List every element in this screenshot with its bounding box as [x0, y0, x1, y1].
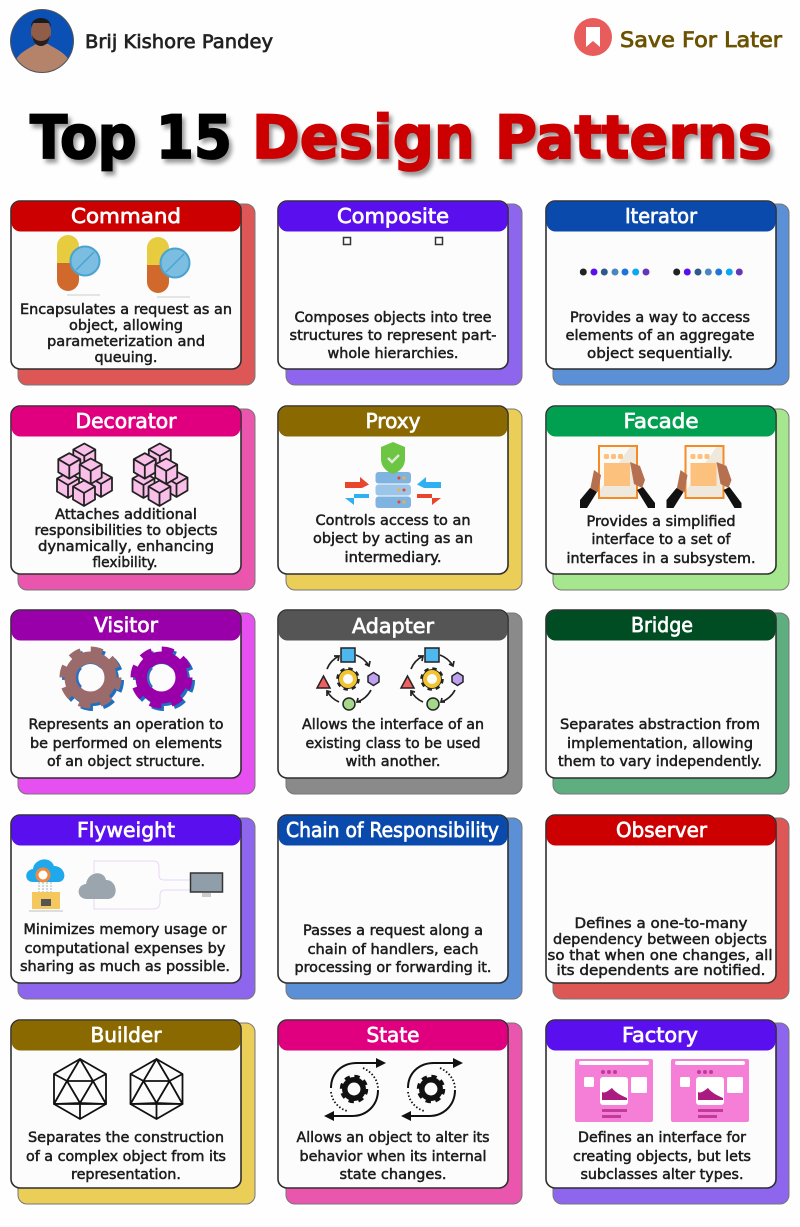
- description: processing or forwarding it.: [294, 960, 492, 976]
- description: dependency between objects: [553, 932, 767, 948]
- description: creating objects, but lets: [573, 1149, 751, 1165]
- description: [558, 717, 762, 770]
- description: Allows the interface of an: [302, 717, 484, 733]
- title: [30, 103, 772, 173]
- heading: Command: Command: [71, 204, 181, 228]
- description: whole hierarchies.: [328, 346, 458, 362]
- description: Composes objects into tree: [294, 310, 492, 326]
- description: [26, 1130, 226, 1183]
- description: Minimizes memory usage or: [24, 922, 227, 938]
- description: representation.: [71, 1167, 181, 1183]
- panel: Iterator: [546, 201, 789, 385]
- heading: Bridge: [546, 610, 776, 640]
- save label: Save For Later: [620, 28, 782, 52]
- panel: Observer: [546, 815, 789, 999]
- description: interface to a set of: [592, 532, 732, 548]
- description: [313, 513, 473, 566]
- panel: Composite: [278, 201, 522, 385]
- description: Passes a request along a: [303, 923, 483, 939]
- description: [566, 310, 754, 362]
- heading: Decorator: Decorator: [76, 409, 177, 433]
- description: [566, 514, 756, 567]
- heading: Facade: Facade: [624, 409, 698, 433]
- description: Encapsulates a request as an: [20, 302, 232, 318]
- description: [573, 1130, 751, 1183]
- description: chain of handlers, each: [308, 942, 478, 958]
- heading: Iterator: [546, 202, 776, 232]
- description: interfaces in a subsystem.: [566, 551, 756, 567]
- panel: Factory: [546, 1020, 789, 1204]
- description: object, allowing: [69, 318, 183, 334]
- description: elements of an aggregate: [566, 328, 754, 344]
- description: so that when one changes, all: [548, 948, 772, 964]
- description: of a complex object from its: [26, 1149, 226, 1165]
- description: its dependents are notified.: [556, 963, 766, 979]
- panel: Chain of Responsibility: [278, 815, 522, 999]
- heading: Adapter: Adapter: [352, 614, 435, 638]
- description: of an object structure.: [47, 754, 205, 770]
- description: Defines a one-to-many: [574, 916, 748, 932]
- heading: Decorator: [12, 406, 240, 436]
- heading: State: [278, 1020, 508, 1050]
- heading: Observer: [546, 816, 776, 846]
- icon: stacked cubes: [57, 444, 188, 506]
- heading: Composite: Composite: [337, 204, 449, 228]
- heading: Composite: [278, 202, 508, 232]
- description: subclasses alter types.: [580, 1167, 744, 1183]
- icon: tree nodes: [344, 238, 442, 244]
- icon: shapes cycle: [317, 648, 463, 710]
- heading: Flyweight: Flyweight: [77, 818, 175, 842]
- description: flexibility.: [92, 555, 158, 571]
- description: responsibilities to objects: [34, 523, 218, 539]
- description: implementation, allowing: [567, 736, 753, 752]
- description: [296, 1130, 490, 1183]
- panel: Adapter: [278, 610, 522, 794]
- panel: Command: [11, 201, 255, 385]
- description: state changes.: [340, 1167, 446, 1183]
- heading: Visitor: [12, 610, 240, 640]
- description: [34, 507, 218, 571]
- description: [20, 922, 230, 975]
- description: computational expenses by: [24, 941, 226, 957]
- panel: State: [278, 1020, 522, 1204]
- description: existing class to be used: [306, 736, 480, 752]
- save for later: [574, 18, 782, 56]
- description: [28, 717, 224, 770]
- description: Provides a simplified: [586, 514, 736, 530]
- heading: Factory: Factory: [622, 1023, 698, 1047]
- icon: dot sequence: [580, 268, 743, 276]
- panel: Flyweight: [11, 815, 255, 999]
- description: Attaches additional: [55, 507, 197, 523]
- description: structures to represent part-: [290, 328, 496, 344]
- author block: [10, 9, 273, 74]
- author name: Brij Kishore Pandey: [85, 31, 273, 53]
- description: Separates the construction: [28, 1130, 224, 1146]
- description: [294, 923, 492, 976]
- panel: Decorator: [11, 406, 255, 590]
- icon: icosahedrons: [54, 1059, 182, 1119]
- heading: Factory: [546, 1020, 776, 1050]
- avatar photo: [10, 9, 74, 74]
- title: Top 15: [30, 103, 232, 173]
- description: Defines an interface for: [578, 1130, 746, 1146]
- heading: Visitor: Visitor: [94, 613, 159, 637]
- description: Provides a way to access: [570, 310, 750, 326]
- heading: Builder: [12, 1020, 240, 1050]
- heading: Command: [12, 202, 240, 232]
- description: Controls access to an: [316, 513, 470, 529]
- icon: cloud, laptop and monitor: [26, 859, 222, 912]
- description: them to vary independently.: [558, 754, 762, 770]
- title: Design Patterns: [252, 103, 772, 173]
- description: dynamically, enhancing: [38, 539, 214, 555]
- icon: hands holding tablet: [580, 446, 742, 508]
- heading: Facade: [546, 406, 776, 436]
- heading: Flyweight: [12, 816, 240, 846]
- heading: Iterator: Iterator: [625, 204, 698, 228]
- description: queuing.: [94, 350, 158, 366]
- icon: state cycle gears: [324, 1058, 463, 1121]
- icon: gears: [63, 650, 192, 708]
- heading: Proxy: Proxy: [366, 409, 421, 433]
- heading: Adapter: [278, 610, 508, 640]
- panel: Facade: [546, 406, 789, 590]
- description: Represents an operation to: [28, 717, 224, 733]
- description: [20, 302, 232, 366]
- panel: Proxy: [278, 406, 522, 590]
- description: [302, 717, 484, 770]
- heading: Observer: Observer: [616, 818, 708, 842]
- description: behavior when its internal: [300, 1149, 486, 1165]
- description: object by acting as an: [313, 531, 473, 547]
- description: with another.: [346, 754, 440, 770]
- description: object sequentially.: [587, 346, 733, 362]
- description: [548, 916, 772, 979]
- description: be performed on elements: [30, 736, 222, 752]
- icon: bookmark: [574, 18, 612, 56]
- heading: State: State: [366, 1023, 420, 1047]
- heading: Bridge: Bridge: [631, 613, 693, 637]
- icon: capsule and tablet: [57, 235, 190, 297]
- description: Allows an object to alter its: [296, 1130, 490, 1146]
- description: intermediary.: [344, 550, 442, 566]
- icon: server with shield and arrows: [345, 442, 441, 508]
- heading: Proxy: [278, 406, 508, 436]
- panel: Builder: [11, 1020, 255, 1204]
- heading: Chain of Responsibility: Chain of Responsibility: [286, 818, 499, 842]
- description: sharing as much as possible.: [20, 959, 230, 975]
- description: Separates abstraction from: [560, 717, 760, 733]
- panel: Bridge: [546, 610, 789, 794]
- panel: Visitor: [11, 610, 255, 794]
- heading: Builder: Builder: [90, 1023, 162, 1047]
- description: [290, 310, 496, 362]
- icon: shoe web pages: [575, 1059, 749, 1122]
- description: parameterization and: [47, 334, 205, 350]
